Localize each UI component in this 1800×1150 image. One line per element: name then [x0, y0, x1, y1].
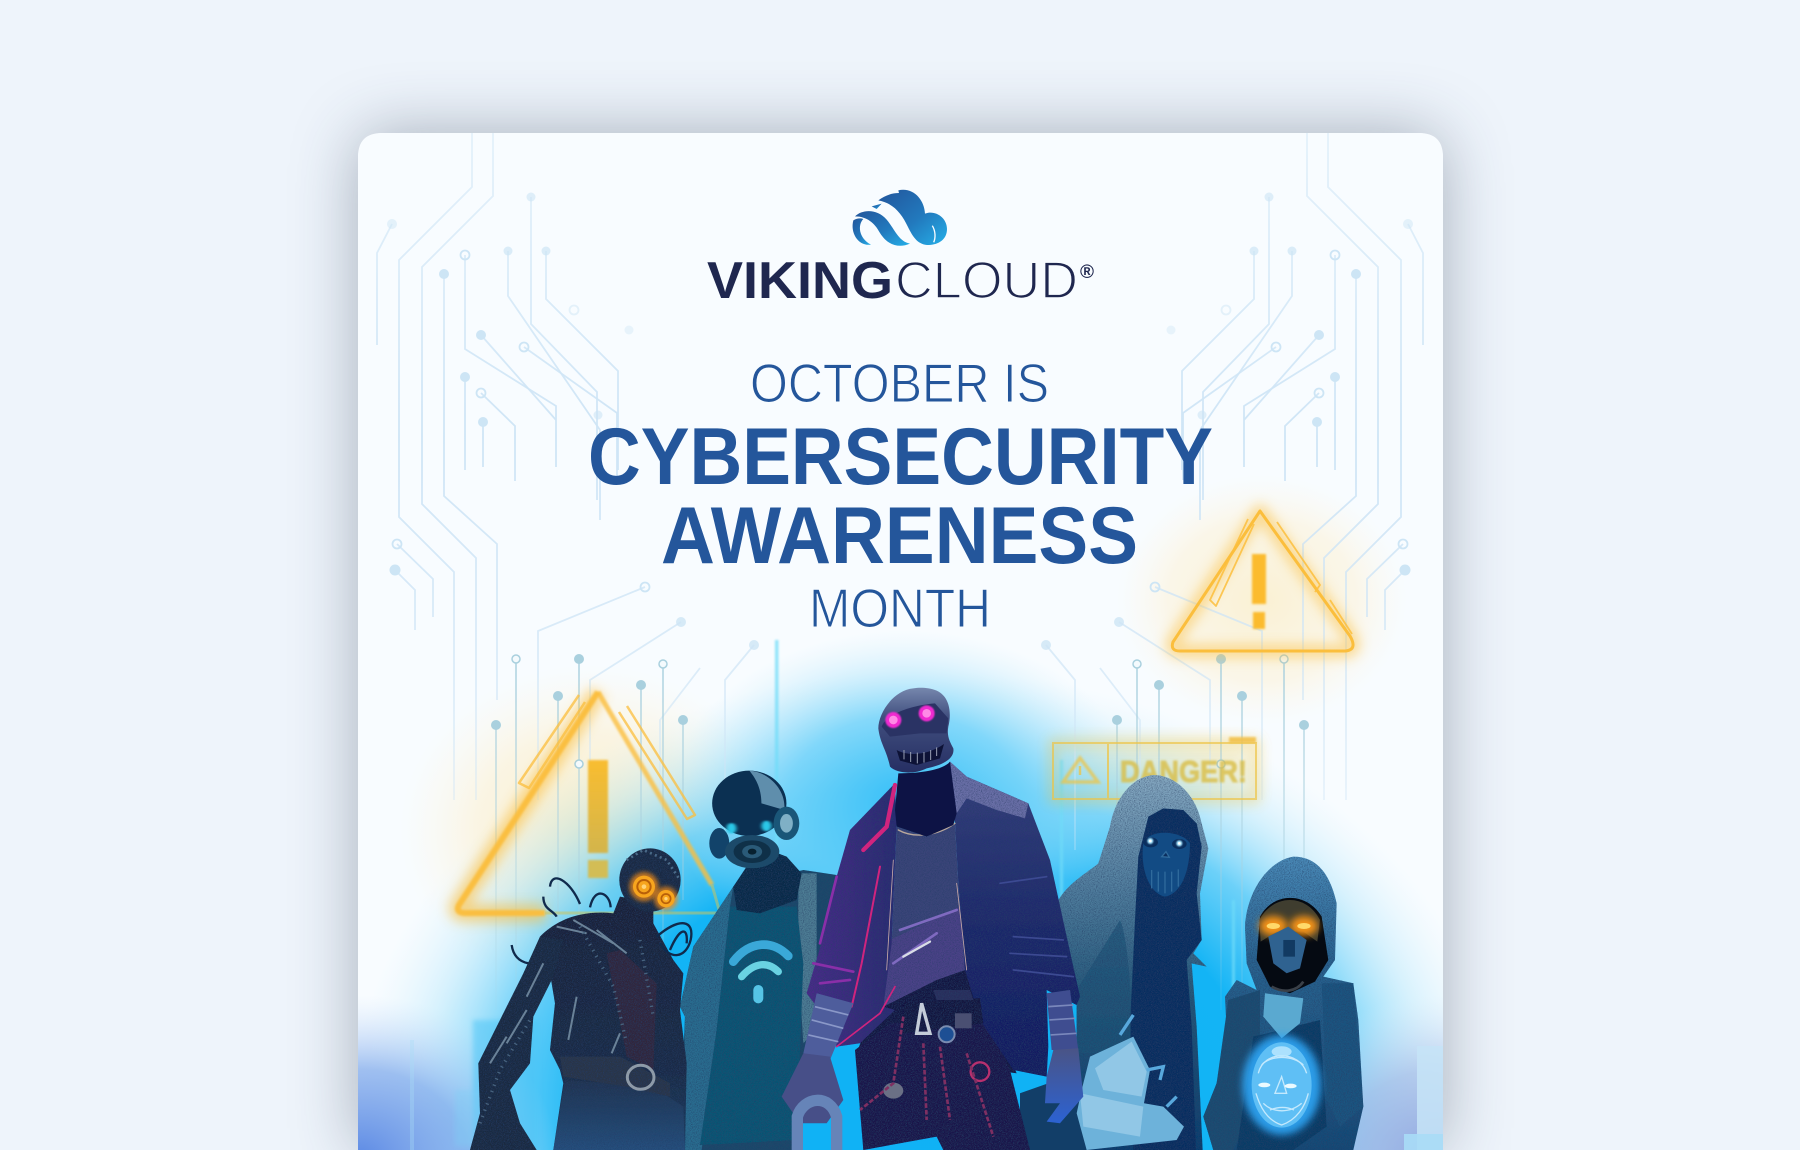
hood and robe — [1057, 775, 1208, 1150]
head — [878, 688, 953, 773]
danger sign — [1053, 737, 1256, 799]
circuit board pattern — [377, 133, 1423, 1010]
face — [1257, 898, 1328, 993]
heading line: October is: OCTOBER IS — [750, 352, 1049, 414]
characters — [470, 688, 1363, 1150]
robe and shirt — [680, 847, 837, 1150]
character: hooded skull — [1020, 775, 1208, 1150]
body, jacket, trousers — [807, 762, 1080, 1150]
jacket magenta rim light — [813, 785, 1073, 1047]
neck wrap — [895, 762, 957, 837]
title — [588, 352, 1213, 639]
wordmark: CLOUD — [895, 252, 1078, 310]
ice rocks — [1020, 1015, 1184, 1150]
zombie body — [470, 848, 687, 1150]
character: small hooded with glowing mask — [1203, 857, 1363, 1150]
warning triangle: right — [1172, 511, 1353, 651]
zombie details — [480, 850, 691, 1123]
character: gas mask with wifi — [680, 771, 837, 1150]
skull — [1143, 833, 1190, 897]
danger sign: DANGER! — [1120, 754, 1247, 789]
poster stage — [318, 93, 1483, 1150]
heading line: Cybersecurity: CYBERSECURITY — [588, 412, 1213, 502]
wordmark: VIKING — [707, 252, 893, 310]
zombie eyes — [629, 872, 678, 911]
icon: cloud mark — [853, 190, 947, 246]
blue glow behind characters — [358, 630, 1443, 1150]
neck and collar — [1263, 993, 1303, 1038]
warning triangle: left — [458, 692, 720, 913]
poster artwork — [358, 133, 1443, 1150]
blue-violet wash in bottom corners — [358, 995, 1443, 1150]
wordmark: ® — [1080, 262, 1094, 283]
glowing mask head — [1242, 1035, 1321, 1135]
panel: card — [358, 133, 1443, 1150]
logo — [707, 190, 1094, 310]
mask head — [709, 771, 799, 868]
icon: wifi — [733, 945, 788, 998]
neon streaks — [774, 638, 1236, 988]
belt gear and chains — [860, 1003, 993, 1137]
card background tint — [358, 133, 1443, 155]
heading line: Month: MONTH — [809, 577, 991, 639]
amber haze behind warning signs — [430, 495, 1384, 926]
character: wire zombie — [470, 848, 691, 1150]
hood and jacket — [1203, 857, 1363, 1150]
wordmark — [707, 252, 1094, 310]
heading line: Awareness: AWARENESS — [661, 491, 1138, 581]
pixel blocks at bottom — [410, 1020, 1443, 1150]
character: centre cyber ghoul — [782, 688, 1083, 1150]
forearms and hands — [782, 990, 1083, 1150]
